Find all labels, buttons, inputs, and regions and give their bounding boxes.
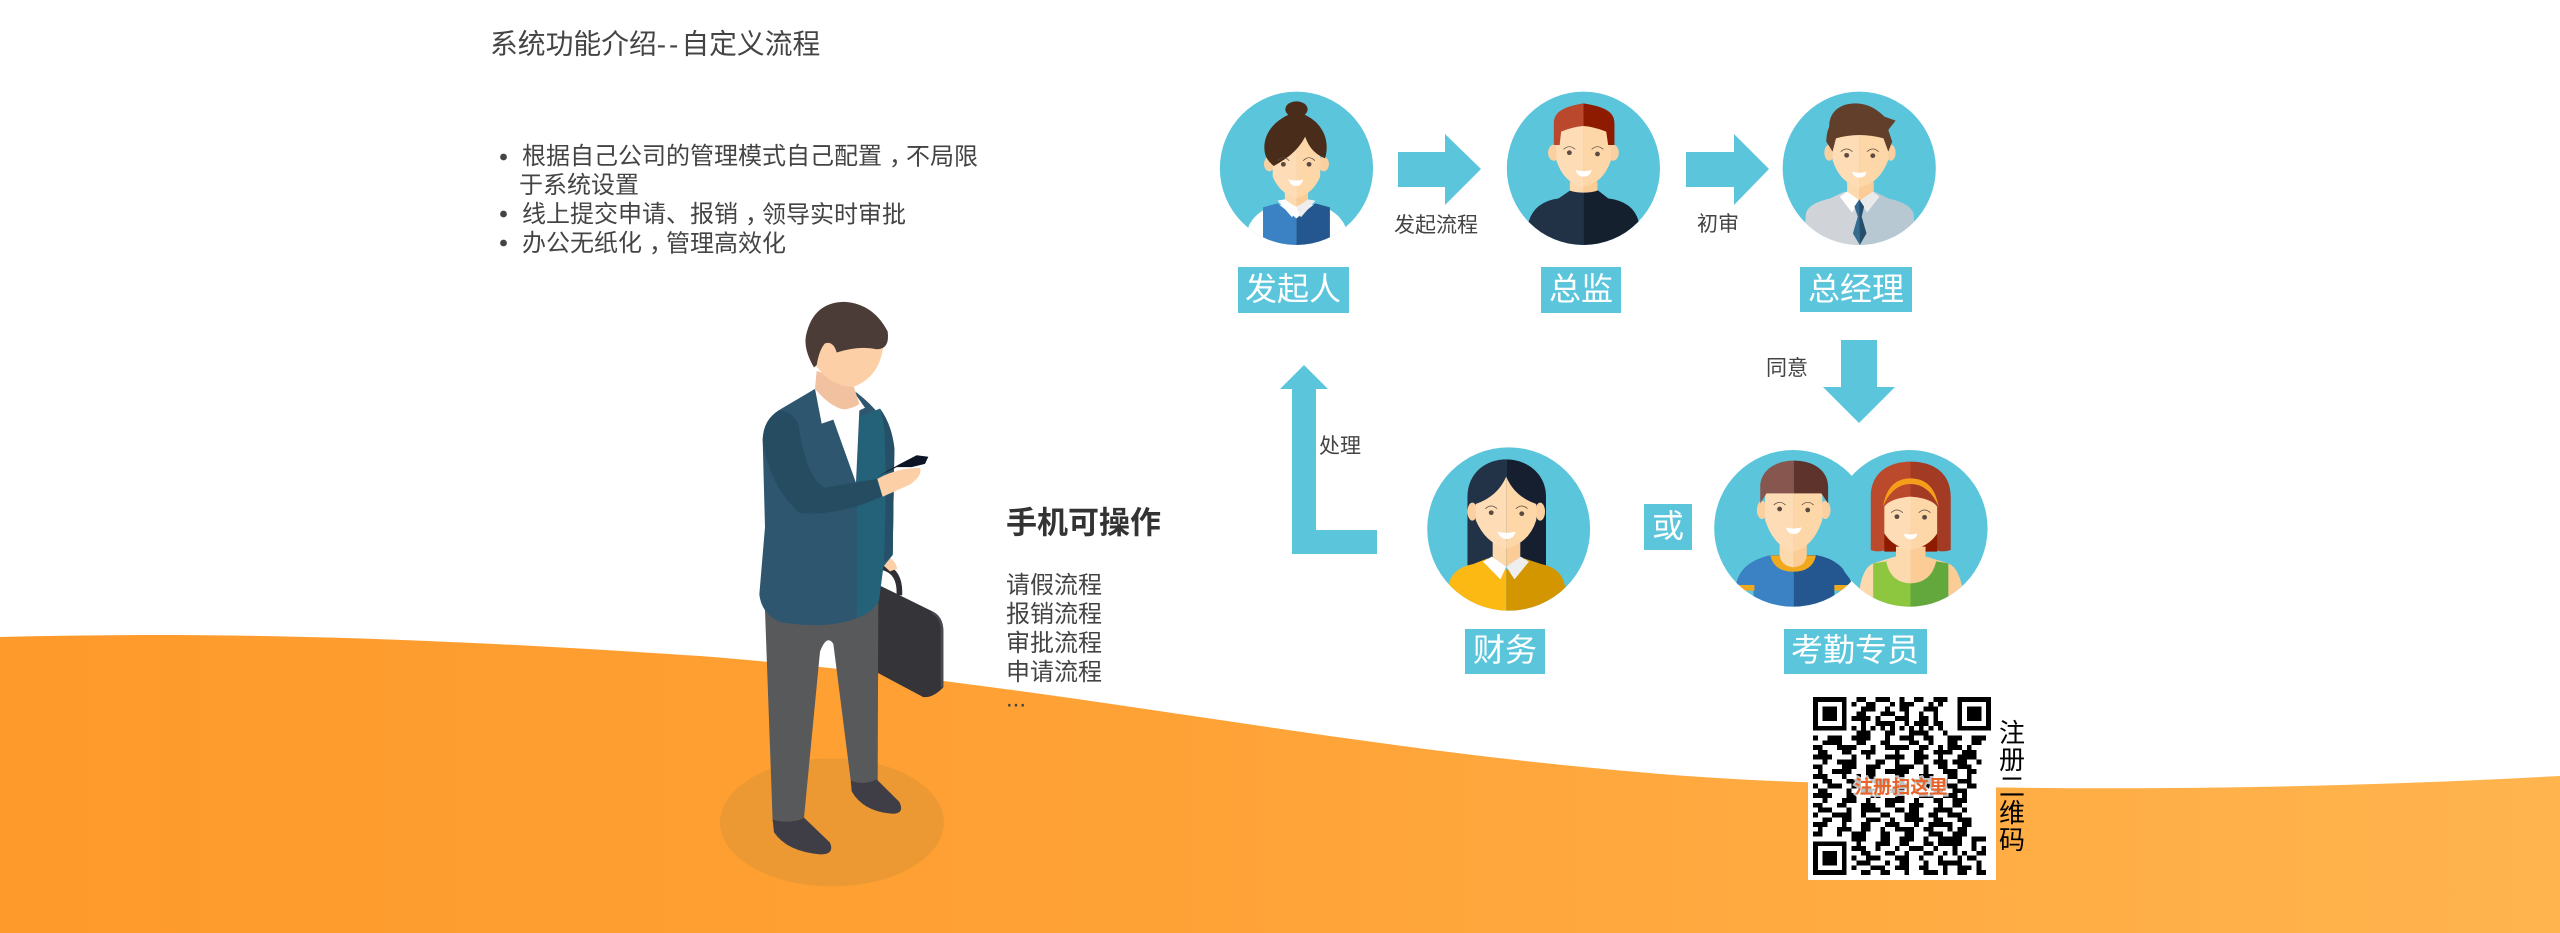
avatar: director — [1507, 92, 1660, 247]
bottom row of the flow, drawn in a scaled coordinate space — [1427, 447, 1988, 613]
role tag: director — [1541, 267, 1621, 313]
label: first review: 初审 — [1697, 213, 1739, 236]
bullet list: features: 办公无纸化 ，管理高效化 — [522, 230, 786, 257]
list of mobile workflows: 申请流程 — [1006, 659, 1102, 686]
vertical caption: register QR code — [1999, 718, 2025, 855]
connector tag: or: 或 — [1652, 508, 1684, 544]
illustration: businessman with phone and briefcase — [720, 302, 944, 886]
vertical caption: register QR code: 注 — [1999, 718, 2025, 748]
QR code modules — [1813, 697, 1991, 875]
role tag: general manager — [1800, 267, 1912, 312]
role tag: initiator: 发起人 — [1245, 271, 1341, 307]
arrow: initiator to director — [1398, 134, 1481, 205]
list of mobile workflows: ... — [1006, 686, 1026, 712]
bullet list: features: 线上提交申请、报销 ，领导实时审批 — [522, 201, 906, 228]
list of mobile workflows — [1006, 572, 1102, 712]
list of mobile workflows: 审批流程 — [1006, 630, 1102, 657]
QR code panel — [1808, 691, 1996, 880]
list of mobile workflows: 请假流程 — [1006, 572, 1102, 599]
avatar: general manager — [1783, 92, 1936, 247]
connector tag: or — [1644, 504, 1692, 550]
title: 系统功能介绍--自定义流程 — [490, 28, 820, 60]
bullet list: features: 根据自己公司的管理模式自己配置 ，不局限 — [522, 143, 978, 170]
avatar: attendance specialist (male) — [1714, 450, 1852, 607]
arrow: finance back to initiator — [1280, 365, 1377, 554]
orange wave background — [0, 635, 2560, 933]
vertical caption: register QR code: 码 — [1999, 825, 2025, 855]
role tag: general manager: 总经理 — [1808, 271, 1904, 307]
label: start workflow: 发起流程 — [1394, 214, 1478, 237]
avatar: attendance specialist (female) — [1831, 450, 1988, 608]
arrow: director to general manager — [1686, 134, 1769, 205]
role tag: finance: 财务 — [1473, 632, 1537, 668]
QR overlay text: 注册扫这里 — [1855, 776, 1947, 798]
avatar: finance — [1427, 447, 1590, 613]
vertical caption: register QR code: 二 — [1999, 772, 2025, 802]
label: process: 处理 — [1319, 435, 1361, 458]
role tag: finance — [1465, 629, 1545, 674]
avatar: initiator — [1220, 92, 1373, 247]
bullet list: features: 于系统设置 — [519, 172, 639, 199]
role tag: attendance specialist: 考勤专员 — [1791, 632, 1919, 668]
arrow: general manager down to attendance — [1823, 340, 1895, 423]
vertical caption: register QR code: 维 — [1999, 798, 2025, 828]
top row of the flow, drawn in a scaled coordinate space — [1220, 92, 1936, 247]
role tag: initiator — [1238, 267, 1349, 313]
role tag: director: 总监 — [1549, 271, 1613, 307]
label: agree: 同意 — [1766, 357, 1808, 380]
heading: mobile operation: 手机可操作 — [1006, 506, 1161, 540]
vertical caption: register QR code: 册 — [1999, 745, 2025, 775]
list of mobile workflows: 报销流程 — [1006, 601, 1102, 628]
bullet list: features — [500, 143, 978, 257]
